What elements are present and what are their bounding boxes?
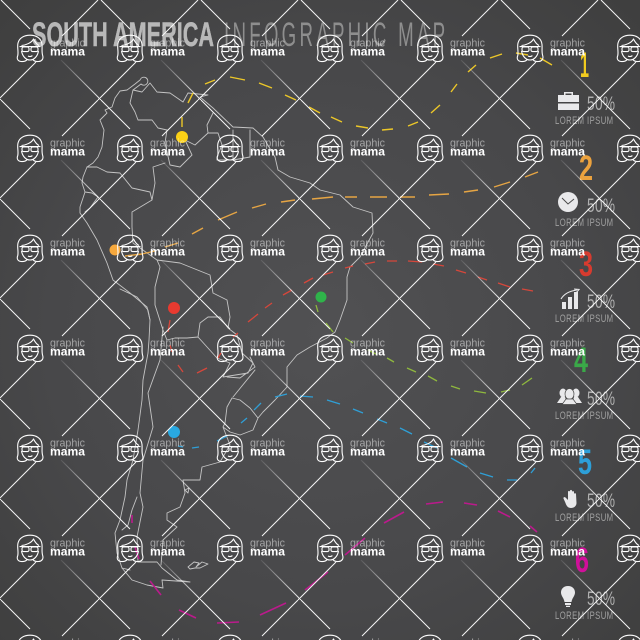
number 3: 3 — [579, 245, 593, 284]
caption 5: LOREM IPSUM — [555, 512, 613, 524]
route 5: blue dashed line — [178, 394, 535, 480]
marker: orange location dot — [110, 244, 120, 256]
icon: hand — [563, 490, 576, 508]
stat 6: 50% — [587, 588, 615, 610]
legend item 2 — [555, 149, 615, 229]
title: INFOGRAPHIC MAP — [224, 15, 445, 53]
marker: green location dot — [316, 292, 326, 302]
caption 6: LOREM IPSUM — [555, 610, 613, 622]
marker: red location dot — [168, 302, 180, 314]
icon: clock — [558, 192, 578, 212]
route 3: red dashed line — [168, 261, 533, 373]
stat 4: 50% — [587, 388, 615, 410]
route 2: orange dashed line — [125, 172, 538, 256]
route 6: magenta dashed line — [132, 502, 537, 623]
caption 2: LOREM IPSUM — [555, 217, 613, 229]
icon: light bulb — [561, 586, 575, 607]
stat 3: 50% — [587, 291, 615, 313]
title — [32, 15, 445, 54]
legend item 5 — [555, 443, 615, 524]
legend item 6 — [555, 541, 615, 622]
route 1: yellow dashed line — [182, 53, 552, 130]
stat 1: 50% — [587, 93, 615, 115]
marker: blue location dot — [168, 426, 180, 438]
caption 4: LOREM IPSUM — [555, 410, 613, 422]
route 4: green dashed line — [316, 305, 532, 393]
stat 2: 50% — [587, 195, 615, 217]
legend item 3 — [555, 245, 615, 325]
map: islands — [185, 488, 208, 569]
number 5: 5 — [578, 443, 592, 482]
title: SOUTH AMERICA — [32, 16, 214, 54]
icon: bar chart — [561, 289, 579, 309]
stat 5: 50% — [587, 490, 615, 512]
caption 3: LOREM IPSUM — [555, 313, 613, 325]
number 6: 6 — [575, 541, 589, 580]
number 4: 4 — [574, 341, 588, 380]
map: country borders — [85, 90, 255, 570]
caption 1: LOREM IPSUM — [555, 115, 613, 127]
number 2: 2 — [579, 149, 593, 188]
map: South America outline — [80, 77, 373, 588]
map: continent coastline — [80, 77, 373, 588]
legend item 4 — [555, 341, 615, 422]
marker: yellow location dot — [176, 131, 188, 143]
icon: briefcase — [558, 92, 579, 110]
icon: people — [557, 388, 582, 404]
legend item 1 — [555, 46, 615, 127]
legend item 1: 1 — [580, 46, 589, 85]
